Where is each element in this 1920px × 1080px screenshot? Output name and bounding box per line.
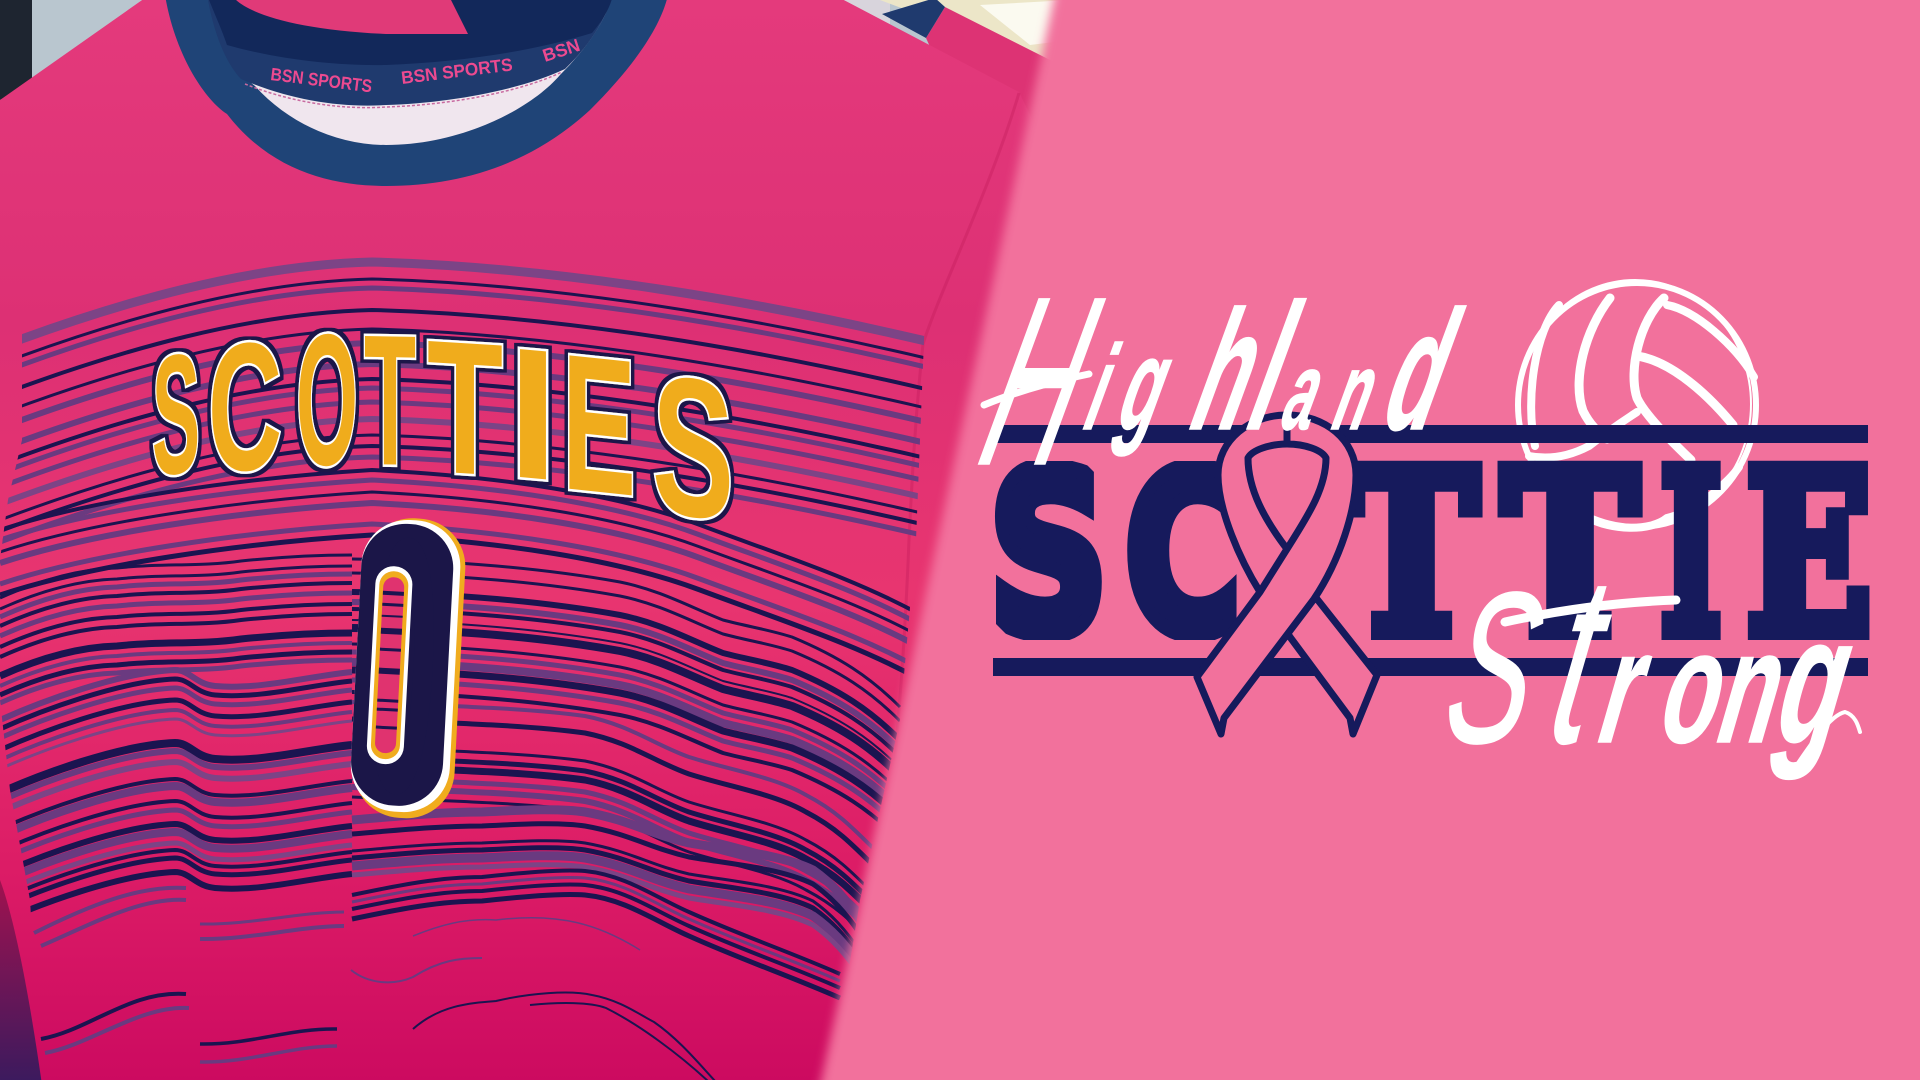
bottom bar [993,658,1868,676]
Highland brush crossbar [984,374,1089,405]
collar [165,0,668,186]
jersey lettering: SCOTTIES: I [508,308,558,520]
jersey lettering: SCOTTIES: E [562,313,636,538]
heading: SCOTTIE block letters: T [1345,422,1478,685]
top bar [993,425,1868,443]
jersey stripes [0,262,930,1080]
script text: Highland: n [1324,329,1390,452]
jersey lettering: SCOTTIES: T [427,301,503,517]
collar label text: BSN SPORTS [400,54,514,88]
script text: Highland: h [1178,276,1281,466]
icon: awareness ribbon [1197,415,1377,734]
panel: jersey photo [0,0,1100,1080]
icon: volleyball [1518,280,1756,528]
Strong brush crossbar [1505,600,1676,622]
script text: Highland: H [961,248,1120,516]
jersey body [0,0,1100,1080]
Strong g flourish [1790,712,1860,775]
collar label text: BSN [540,35,582,66]
jersey number: 0: 0 [356,474,448,873]
jersey lettering: SCOTTIES [152,294,734,563]
jersey lettering: SCOTTIES: S [152,318,200,513]
collar label text: BSN SPORTS [270,64,373,96]
heading: SCOTTIE block letters: I [1660,422,1722,685]
collar label text [270,35,582,96]
jersey lettering: SCOTTIES: C [208,302,282,512]
heading: SCOTTIE block letters: E [1746,422,1872,685]
right sleeve seam [895,93,1019,760]
script text: Strong: r [1590,598,1663,777]
heading: SCOTTIE block letters: T [1502,422,1638,685]
script text: Strong: t [1536,526,1628,794]
jersey lettering: SCOTTIES: O [296,294,358,506]
heading: SCOTTIE block letters: S [989,424,1108,685]
script text: Highland: g [1107,312,1186,457]
heading: SCOTTIE block letters [994,460,1870,640]
jersey lettering: SCOTTIES: S [652,332,734,563]
photo backdrop [0,0,1100,260]
script text: Strong: g [1766,579,1866,781]
panel: Highland Scottie Strong logo [978,279,1870,780]
left sleeve shadow [0,880,42,1080]
script text: Strong: o [1651,598,1740,777]
jersey lettering: SCOTTIES: T [364,297,416,505]
panel: pink background with soft diagonal edge [815,0,1920,1080]
script text: Strong: n [1709,598,1798,777]
script text: Highland: d [1370,276,1474,466]
script text: Highland: i [1075,321,1129,455]
script text: Highland: l [1234,268,1315,468]
script text: Highland: a [1273,329,1336,452]
script text: Strong: S [1432,547,1558,788]
heading: SCOTTIE block letters: C [1125,424,1241,685]
